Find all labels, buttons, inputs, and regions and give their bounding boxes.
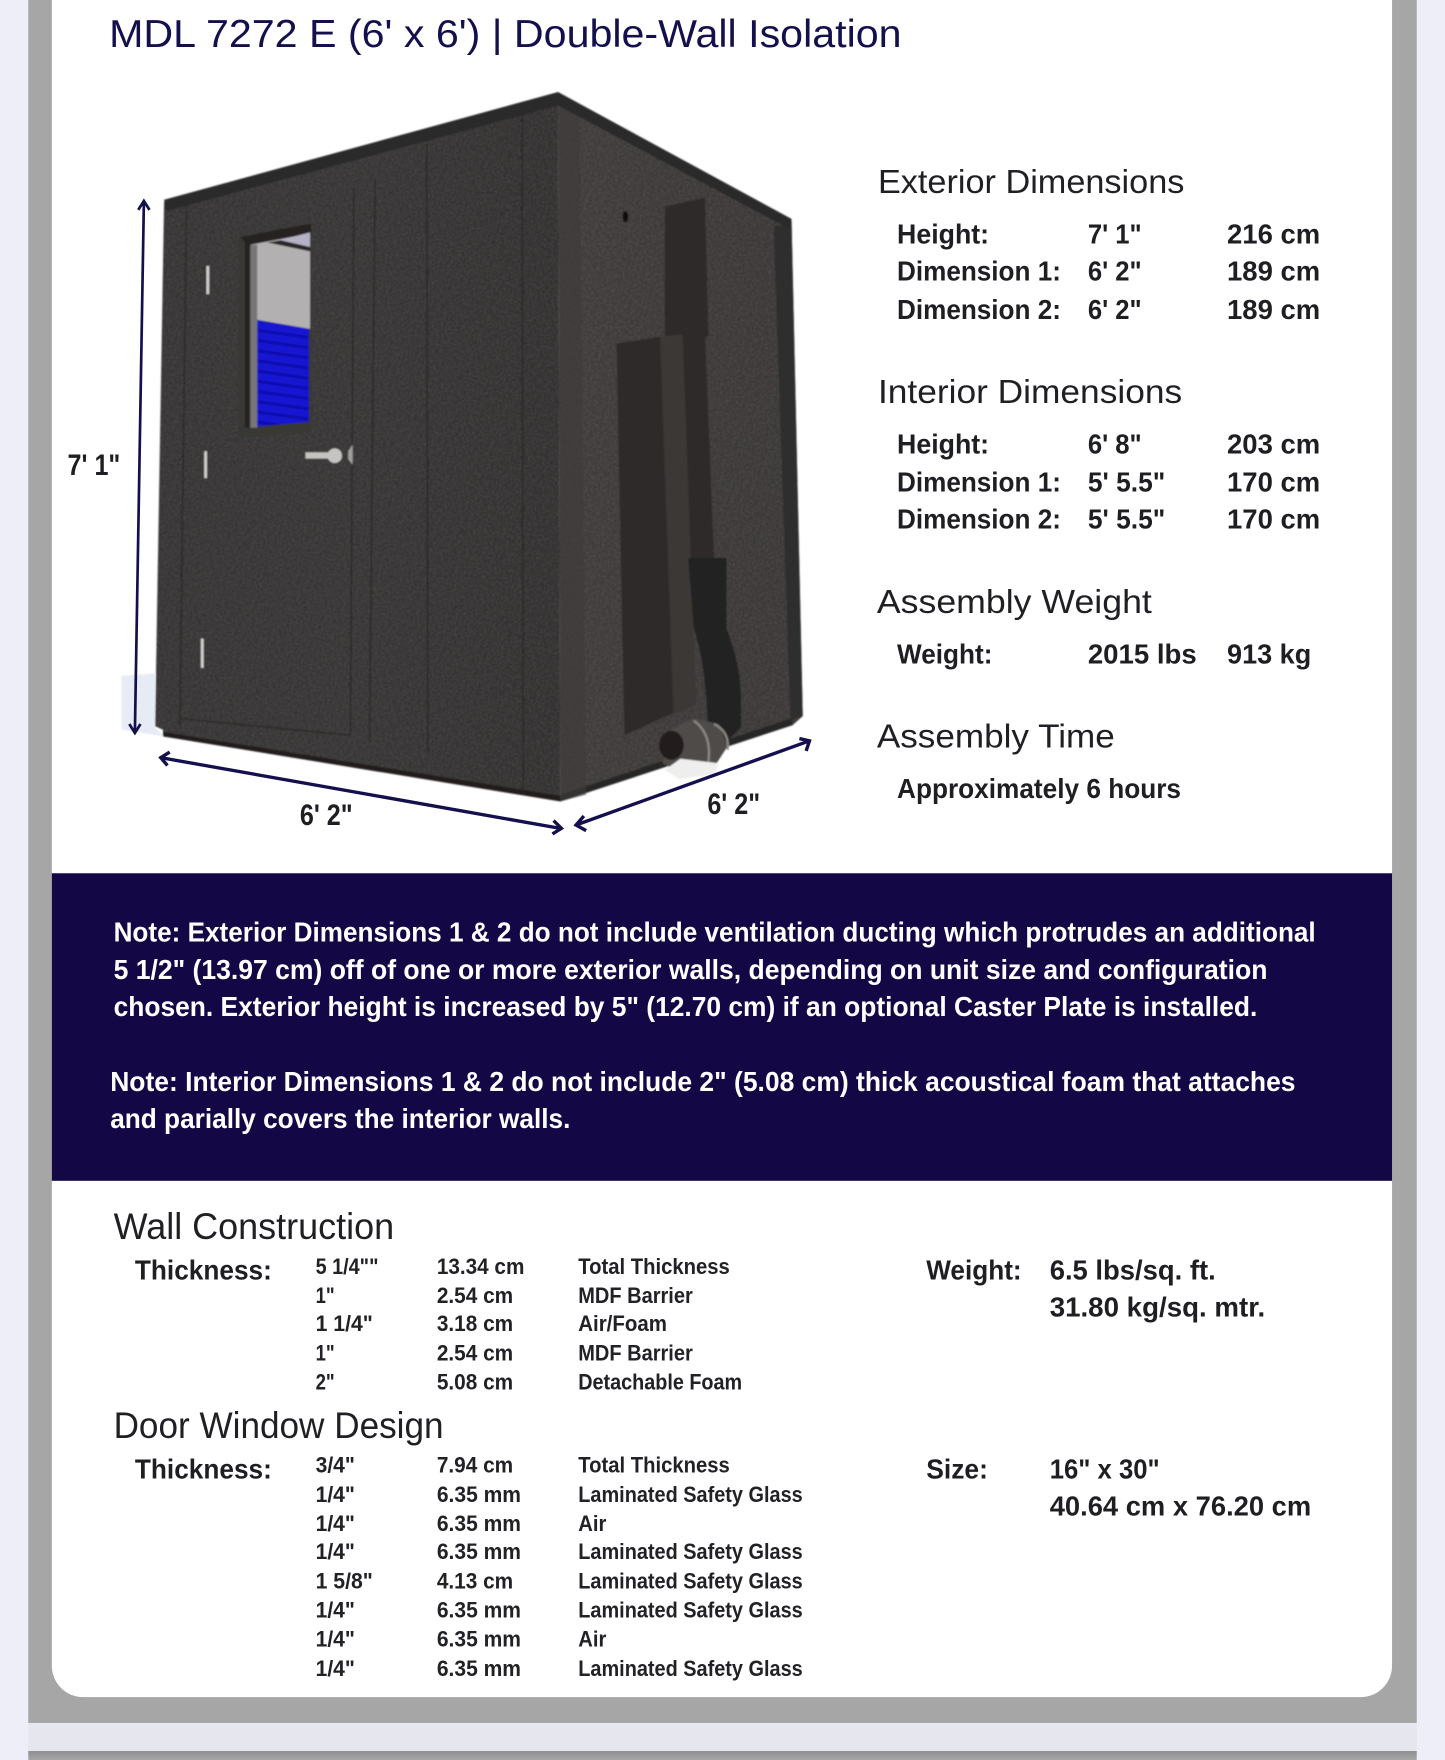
thickness table: 2.54 cm — [437, 1283, 513, 1308]
note 2: and parially covers the interior walls. — [110, 1103, 570, 1134]
thickness table: 6.35 mm — [437, 1656, 521, 1681]
upper vent duct, dark face — [665, 198, 708, 341]
heading: Exterior Dimensions — [878, 164, 1184, 201]
panel: wall construction — [114, 1205, 1265, 1395]
thickness table: 1/4" — [316, 1511, 355, 1536]
thickness table: 6.35 mm — [437, 1597, 521, 1622]
thickness table: Air/Foam — [578, 1311, 667, 1336]
thickness label: Thickness: — [135, 1453, 272, 1484]
note 1: Note: Exterior Dimensions 1 & 2 do not include ventilation ducting which protrudes an additional — [114, 917, 1316, 948]
arrow: side width — [576, 739, 809, 831]
rows: 6' 2" — [1088, 294, 1142, 325]
wall weight: Weight: — [926, 1255, 1022, 1286]
thickness table: 3.18 cm — [437, 1311, 513, 1336]
band below frame — [28, 1723, 1417, 1751]
thickness table: 6.35 mm — [437, 1482, 521, 1507]
wheel fitting — [659, 718, 728, 779]
wall weight: 31.80 kg/sq. mtr. — [1050, 1292, 1265, 1323]
thickness table: 1" — [316, 1283, 335, 1308]
rows: 7' 1" — [1088, 219, 1142, 250]
thickness table: 1" — [316, 1340, 335, 1365]
heading: Assembly Weight — [877, 584, 1153, 621]
front bottom edge — [163, 732, 560, 801]
lower vent duct, light face — [660, 334, 696, 714]
thickness table: 2.54 cm — [437, 1340, 513, 1365]
thickness table: 6.35 mm — [437, 1539, 521, 1564]
window size: Size: — [926, 1453, 988, 1484]
rows: 170 cm — [1227, 504, 1320, 535]
thickness table: 1/4" — [316, 1597, 355, 1622]
lower vent duct, dark face — [616, 337, 674, 735]
thickness table: Laminated Safety Glass — [578, 1482, 803, 1507]
thickness table: Air — [578, 1511, 607, 1536]
window size: 40.64 cm x 76.20 cm — [1050, 1490, 1311, 1521]
hinges — [202, 266, 208, 668]
arrow: height — [129, 201, 149, 733]
note 2: Note: Interior Dimensions 1 & 2 do not include 2" (5.08 cm) thick acoustical foam that attaches — [110, 1066, 1296, 1097]
rows: Dimension 2: — [897, 294, 1061, 325]
thickness table: 1/4" — [316, 1482, 355, 1507]
thickness table: 1/4" — [316, 1627, 355, 1652]
note 1: 5 1/2" (13.97 cm) off of one or more exterior walls, depending on unit size and configuration — [114, 954, 1267, 985]
note 1: chosen. Exterior height is increased by 5" (12.70 cm) if an optional Caster Plate is installed. — [114, 991, 1257, 1022]
wall weight — [926, 1255, 1265, 1323]
thickness label: Thickness: — [135, 1255, 272, 1286]
window size — [926, 1453, 1311, 1521]
thickness table: 6.35 mm — [437, 1511, 521, 1536]
blue foam — [257, 320, 309, 427]
roof band — [164, 92, 792, 230]
wall weight: 6.5 lbs/sq. ft. — [1050, 1255, 1216, 1286]
window interior — [251, 233, 310, 428]
rows: 189 cm — [1227, 294, 1320, 325]
rows: 5' 5.5" — [1088, 504, 1165, 535]
side bottom edge — [560, 718, 793, 801]
thickness table: 4.13 cm — [437, 1568, 513, 1593]
thickness table: 13.34 cm — [437, 1254, 524, 1279]
next grey frame edge — [28, 1751, 1417, 1760]
thickness table: 5.08 cm — [437, 1370, 513, 1395]
booth front face — [155, 94, 560, 801]
heading: Interior Dimensions — [878, 374, 1182, 411]
window frame — [238, 223, 311, 438]
panel: exterior dimensions — [878, 164, 1320, 325]
thickness table — [316, 1254, 742, 1395]
floor shadow — [121, 673, 164, 736]
rows — [897, 428, 1320, 535]
thickness table: 2" — [316, 1370, 335, 1395]
rows: 203 cm — [1227, 428, 1320, 459]
thickness table: Total Thickness — [578, 1453, 730, 1478]
thickness table: 1 5/8" — [316, 1568, 373, 1593]
panel: assembly weight — [877, 584, 1311, 669]
label: side width: 6' 2" — [707, 789, 760, 821]
thickness table: MDF Barrier — [578, 1340, 693, 1365]
thickness table: Detachable Foam — [578, 1370, 742, 1395]
label: height: 7' 1" — [68, 450, 120, 482]
corner post — [558, 103, 586, 801]
thickness table: Total Thickness — [578, 1254, 730, 1279]
thickness table: 7.94 cm — [437, 1453, 513, 1478]
arrow: front width — [161, 752, 561, 834]
rows: Height: — [897, 219, 989, 250]
note 1 — [114, 917, 1316, 1022]
rows: Dimension 2: — [897, 504, 1061, 535]
thickness table: 6.35 mm — [437, 1627, 521, 1652]
rows: 5' 5.5" — [1088, 467, 1165, 498]
thickness table: Laminated Safety Glass — [578, 1568, 803, 1593]
upper vent duct, lower run — [683, 334, 715, 584]
window size: 16" x 30" — [1050, 1453, 1160, 1484]
door handle — [306, 448, 342, 463]
band — [52, 873, 1392, 1181]
rows: 6' 8" — [1088, 428, 1142, 459]
thickness table: 1/4" — [316, 1539, 355, 1564]
value: Approximately 6 hours — [897, 773, 1181, 804]
rows: 189 cm — [1227, 256, 1320, 287]
heading: Assembly Time — [877, 719, 1115, 756]
booth side face — [558, 94, 803, 801]
booth texture — [155, 94, 803, 801]
note 2 — [110, 1066, 1296, 1134]
thickness table: Laminated Safety Glass — [578, 1597, 803, 1622]
window dark jamb — [240, 223, 311, 428]
rows: Dimension 1: — [897, 256, 1061, 287]
panel: interior dimensions — [878, 374, 1320, 535]
rows: 6' 2" — [1088, 256, 1142, 287]
panel: assembly time — [877, 719, 1181, 804]
rows: Height: — [897, 428, 989, 459]
panel: door window design — [114, 1404, 1311, 1681]
illustration: isolation booth — [121, 92, 803, 801]
vent hole — [623, 211, 628, 222]
thickness table: Laminated Safety Glass — [578, 1539, 803, 1564]
rows: Dimension 1: — [897, 467, 1061, 498]
heading: Wall Construction — [114, 1205, 394, 1247]
row: Weight: — [897, 638, 992, 669]
rows: 170 cm — [1227, 467, 1320, 498]
thickness table: 1/4" — [316, 1656, 355, 1681]
side right trim — [774, 222, 803, 721]
thickness table: Laminated Safety Glass — [578, 1656, 803, 1681]
thickness table: 5 1/4"" — [316, 1254, 378, 1279]
thickness table: 3/4" — [316, 1453, 355, 1478]
thickness table — [316, 1453, 803, 1681]
thickness table: MDF Barrier — [578, 1283, 693, 1308]
title: MDL 7272 E (6' x 6') | Double-Wall Isolation — [109, 12, 902, 56]
rows — [897, 219, 1320, 325]
thickness table: Air — [578, 1627, 607, 1652]
hose — [688, 558, 741, 750]
panel: notes — [52, 873, 1392, 1181]
row: 2015 lbs — [1088, 638, 1197, 669]
label: front width: 6' 2" — [300, 800, 353, 832]
row — [897, 638, 1311, 669]
row: 913 kg — [1227, 638, 1311, 669]
rows: 216 cm — [1227, 219, 1320, 250]
front panel seams — [180, 112, 523, 795]
thickness table: 1 1/4" — [316, 1311, 373, 1336]
heading: Door Window Design — [114, 1404, 444, 1446]
